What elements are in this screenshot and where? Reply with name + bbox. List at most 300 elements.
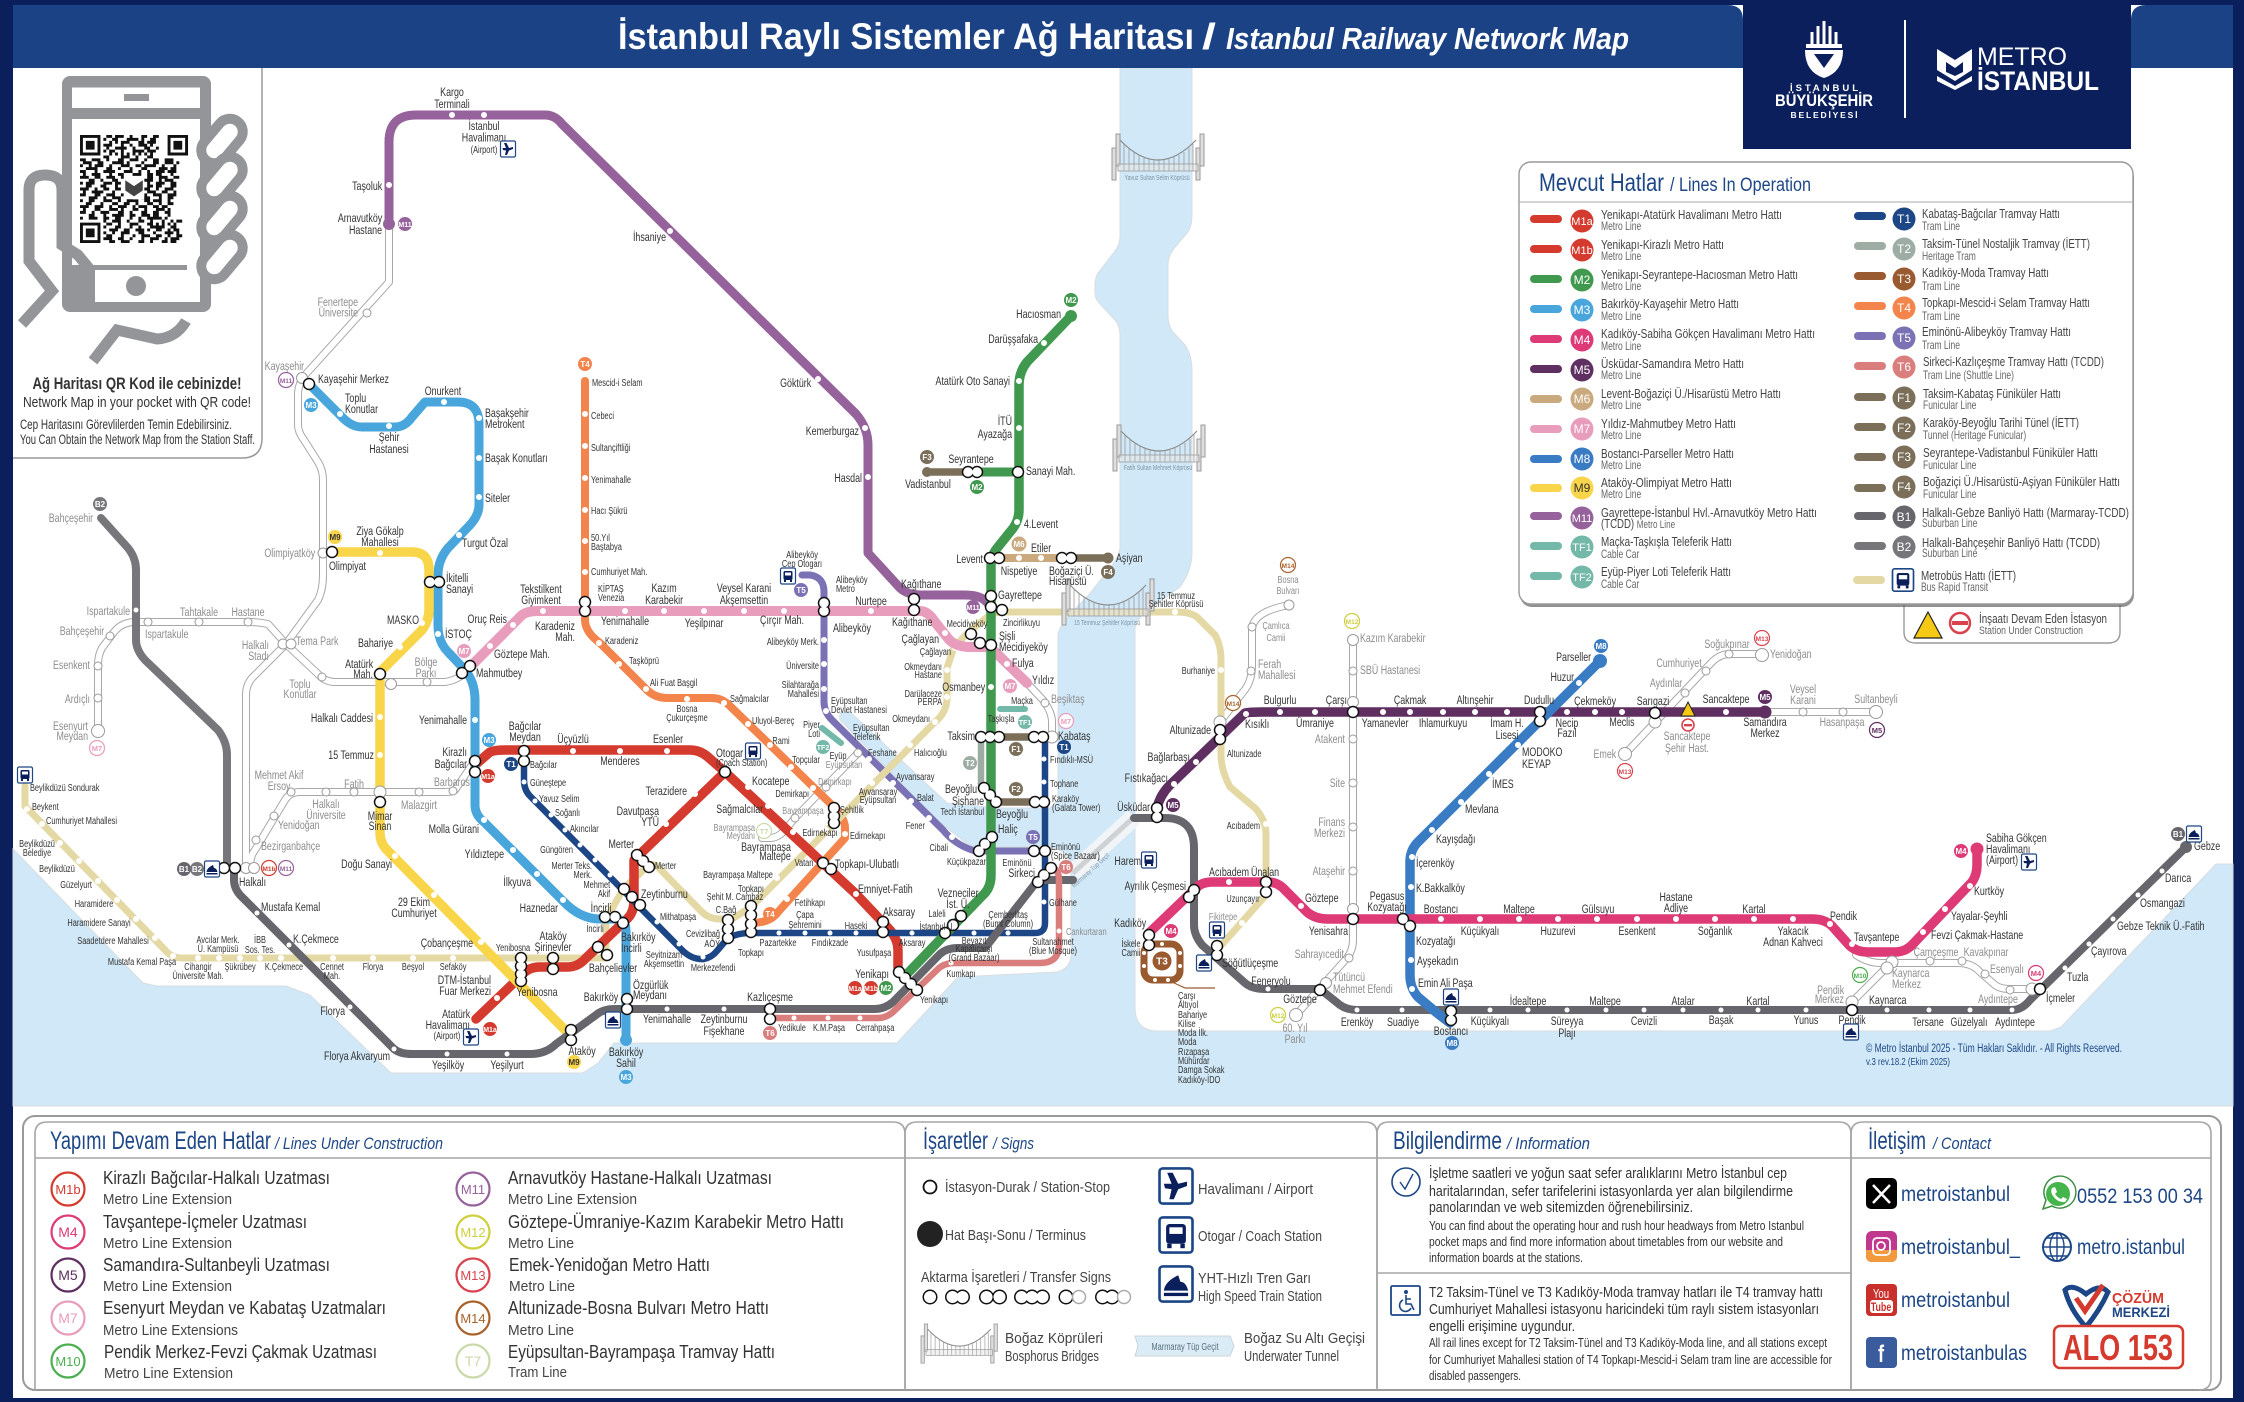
QR text: You Can Obtain the Network Map from the Station Staff. [20, 432, 255, 447]
line badges on map: M11 [966, 605, 980, 612]
station labels: centre west: Baştabya [591, 541, 622, 552]
station labels: centre west: Çağlayan [920, 646, 951, 657]
station labels: northwest: Florya Akvaryum [324, 1050, 390, 1063]
station labels: northwest: Halkalı Caddesi [311, 712, 373, 725]
line: TF1 and TF2 cable cars [822, 709, 1025, 743]
station labels: Asian side: Gebze Teknik Ü.-Fatih [2117, 919, 2205, 933]
station labels: centre west: Sultanahmet [1032, 936, 1074, 947]
station labels: centre west: Rami [772, 735, 790, 746]
station labels: northwest: Başakşehir [485, 407, 529, 420]
station labels: Metrobüs west: Mah. [324, 970, 340, 981]
station labels: northwest: Haznedar [520, 902, 559, 915]
badges column 1: M1b [55, 1182, 81, 1197]
T3 stop names: Altıyol [1178, 999, 1198, 1010]
legend left column: Üsküdar-Samandıra Metro Hattı [1601, 356, 1744, 371]
legend left column: M2 [1574, 273, 1591, 287]
station labels: centre west: Edirnekapı [802, 827, 838, 838]
station labels: centre west: Cibali [930, 842, 948, 853]
station labels: northwest: Halkalı [312, 798, 340, 811]
station labels: northwest: Kemerburgaz [806, 425, 859, 438]
airport sign: Havalimanı / Airport [1198, 1181, 1314, 1198]
station labels: centre west: Atatürk Oto Sanayi [936, 375, 1010, 388]
station labels: centre west: Mithatpaşa [660, 911, 696, 922]
entries column 1: Tavşantepe-İçmeler Uzatması [103, 1212, 307, 1232]
coach station sign: Otogar / Coach Station [1198, 1228, 1322, 1245]
station labels: Asian side: Yayalar-Şeyhli [1951, 910, 2008, 923]
station labels: Asian side: Esenkent [1619, 925, 1656, 938]
station labels: centre west: Eminönü [1002, 857, 1032, 868]
station labels: centre west: Gayrettepe [998, 589, 1042, 602]
station labels: Asian side: Sancaktepe [1703, 693, 1750, 706]
station labels: centre west: (Grand Bazaar) [949, 952, 1000, 963]
station labels: Asian side: Feneryolu [1251, 975, 1291, 988]
station labels: centre west: Karabekir [645, 594, 683, 607]
line badges on map: M9 [568, 1058, 580, 1067]
station labels: northwest: Turgut Özal [462, 536, 508, 550]
station labels: centre west: Sanayi Mah. [1026, 465, 1075, 478]
station labels: northwest: Atatürk [345, 658, 374, 671]
line badges on map: M4 [1165, 927, 1177, 936]
station labels: northwest: Stadı [248, 650, 269, 663]
station labels: Asian side: Altunizade [1227, 748, 1262, 759]
station labels: centre west: Çemberlitaş [988, 909, 1028, 920]
station labels: centre west: Mecidiyeköy [999, 641, 1048, 654]
station labels: northwest: Yenibosna [496, 942, 530, 953]
legend left column: Kadıköy-Sabiha Gökçen Havalimanı Metro Hattı [1601, 326, 1815, 341]
station labels: centre west: Hastane [915, 669, 942, 680]
station labels: centre west: Mahallesi [788, 688, 819, 699]
station labels: Asian side: Yamanevler [1362, 717, 1409, 730]
T3 stop names: Mühürdar [1178, 1055, 1210, 1066]
contact: Facebook: metroistanbulas [1901, 1342, 2027, 1365]
station labels: northwest: 15 Temmuz [328, 749, 374, 762]
line badges on map: M2 [1065, 296, 1077, 305]
station labels: centre west: Şehitler Köprüsü [1149, 598, 1203, 609]
station labels: centre west: C.Bağ [716, 904, 736, 915]
line: M1 [475, 750, 898, 1019]
station labels: Asian side: Mevlana [1465, 803, 1499, 816]
line: M4 [1149, 842, 1984, 952]
station labels: northwest: Metrokent [485, 418, 525, 431]
station labels: Asian side: Gebze [2194, 840, 2220, 853]
station labels: northwest: Kargo [440, 86, 464, 99]
station labels: Asian side: Altunizade [1170, 724, 1211, 737]
T3 stop names: Moda [1178, 1036, 1197, 1047]
line badges on map: T4 [580, 360, 590, 369]
heading: / Information [1506, 1134, 1590, 1153]
legend right column: Eminönü-Alibeyköy Tramvay Hattı [1922, 324, 2071, 339]
station labels: northwest: K.Çekmece [293, 933, 339, 946]
station labels: northwest: (Airport) [471, 144, 497, 155]
station labels: Metrobüs west: Üniversite Mah. [172, 970, 224, 981]
station labels: Asian side: Ayrılık Çeşmesi [1125, 880, 1186, 893]
station labels: northwest: Konutlar [284, 688, 317, 701]
legend right column: Suburban Line [1922, 548, 1978, 560]
station labels: northwest: Ispartakule [145, 628, 189, 641]
station labels: northwest: Çobançeşme [421, 937, 473, 950]
station labels: northwest: Toplu [289, 678, 311, 691]
panel: QR code [13, 68, 262, 458]
airport sign [1160, 1168, 1314, 1204]
station labels: Asian side: Çekmeköy [1574, 695, 1617, 708]
panel: signs [905, 1122, 1377, 1390]
line: M2 [906, 310, 1077, 975]
icon: Marmaray tube: Marmaray Tüp Geçit [1071, 852, 1111, 890]
heading [1868, 1126, 1992, 1155]
high speed train sign: High Speed Train Station [1198, 1288, 1322, 1305]
station labels: centre west: Yenikapı [855, 968, 889, 981]
station labels: centre west: PERPA [918, 696, 942, 707]
station labels: Asian side: Mahallesi [1258, 669, 1295, 682]
station labels: northwest: Özgürlük [633, 978, 669, 992]
station labels: centre west: Yedikule [778, 1022, 806, 1033]
station labels: centre west: Zeytinburnu [641, 888, 688, 901]
line badges on map: TF2 [817, 745, 829, 752]
badges column 2: M12 [460, 1225, 486, 1240]
line: T6 [770, 867, 1059, 1018]
station labels: Asian side: Harem [1114, 855, 1141, 868]
under construction note box: Station Under Construction [1979, 625, 2083, 637]
line badges on map: M8 [1595, 642, 1607, 651]
badges column 2: M14 [460, 1311, 486, 1326]
entries column 1: Metro Line Extension [103, 1235, 232, 1252]
station labels: centre west: Yenimahalle [601, 615, 649, 628]
station labels: Asian side: Aydıntepe [1995, 1016, 2035, 1029]
station labels: centre west: Vatan [795, 857, 813, 868]
station labels: centre west: Merter Teks. [551, 860, 592, 871]
station labels: Asian side: Adnan Kahveci [1763, 936, 1823, 949]
station labels: Asian side: Darıca [2165, 872, 2191, 885]
heading: / Contact [1932, 1134, 1992, 1153]
line badges on map: B1 [2173, 830, 2184, 839]
icon: hand holding phone [22, 76, 248, 361]
station labels: centre west: Bosna [677, 703, 698, 714]
contact: X [1866, 1178, 2010, 1209]
station labels: Asian side: Kartal [1746, 995, 1770, 1008]
badges column 1: M4 [58, 1224, 78, 1240]
line: M3 [309, 384, 632, 1046]
station labels: centre west: Kabataş [1058, 730, 1091, 743]
station labels: Asian side: Göztepe [1283, 993, 1317, 1006]
hollow line badges on map: M12 [1272, 1013, 1285, 1020]
station labels: northwest: Mahmutbey [476, 667, 523, 680]
station labels: centre west: Yenikapı [920, 994, 948, 1005]
station labels: Asian side: Bostancı [1434, 1025, 1468, 1038]
station labels: centre west: (Galata Tower) [1052, 802, 1100, 813]
station stop sign: İstasyon-Durak / Station-Stop [945, 1178, 1110, 1196]
legend left column: TF2 [1572, 572, 1592, 584]
station labels: centre west: Yavuz Selim [539, 793, 580, 804]
station labels: Asian side: İmam H. [1490, 716, 1524, 730]
station labels: centre west: Eyüpsultan [826, 759, 862, 770]
legend right column: Tunnel (Heritage Funicular) [1923, 430, 2026, 442]
T3 stop names: Damga Sokak [1178, 1064, 1225, 1075]
station labels: centre west: Kazım [651, 582, 677, 595]
station labels: centre west: Üçyüzlü [557, 732, 589, 746]
station labels: centre west: Alibeyköy [833, 622, 872, 635]
line badges on map: M11 [398, 222, 412, 229]
legend right column: Seyrantepe-Vadistanbul Füniküler Hattı [1923, 445, 2098, 460]
station labels: centre west: Vezneciler [938, 887, 979, 900]
station labels: centre west: Kağıthane [901, 578, 942, 591]
station labels: northwest: Bahçeşehir [60, 625, 105, 638]
station labels: centre west: Yusufpaşa [857, 947, 891, 958]
station labels: northwest: Malazgirt [401, 799, 437, 812]
station labels: centre west: Akif [598, 888, 611, 899]
entries column 2: Emek-Yenidoğan Metro Hattı [509, 1255, 710, 1275]
station labels: northwest: İncirli [591, 901, 611, 915]
station labels: Asian side: Mehmet Efendi [1333, 983, 1393, 996]
station labels: Asian side: Atalar [1671, 995, 1695, 1008]
station labels: centre west: Taşkışla [988, 713, 1014, 724]
hollow line badges on map: M13 [1756, 636, 1769, 643]
badges column 2: T7 [465, 1353, 481, 1369]
underwater tunnel sign: Boğaz Su Altı Geçişi [1244, 1330, 1365, 1347]
station labels: northwest: Doğu Sanayi [341, 858, 392, 871]
station labels: centre west: Terazidere [646, 785, 687, 798]
station labels: northwest: İstanbul [468, 119, 500, 133]
line badges on map: F1 [1011, 745, 1021, 754]
station labels: northwest: Tema Park [296, 635, 339, 648]
station labels: northwest: İkitelli [446, 571, 468, 585]
logos block: BÜYÜKŞEHİR [1775, 91, 1873, 110]
station labels: Asian side: SBÜ Hastanesi [1360, 663, 1420, 677]
legend right column [1857, 206, 2129, 594]
T3 stop names: Çarşı [1178, 990, 1196, 1001]
legend left column: M4 [1574, 333, 1591, 347]
station labels: Asian side: Samandıra [1743, 716, 1787, 729]
entries column 2: Göztepe-Ümraniye-Kazım Karabekir Metro Hattı [508, 1212, 844, 1232]
station labels: centre west: Vadistanbul [905, 478, 951, 491]
station labels: centre west: Haliç [998, 823, 1018, 836]
legend heading: / Lines In Operation [1670, 175, 1811, 196]
station labels: centre west: Giyimkent [521, 594, 561, 607]
legend right column: Tram Line [1922, 311, 1960, 323]
line: Metrobüs [25, 612, 1266, 958]
station labels: Asian side: Bulvarı [1276, 585, 1300, 596]
line badges on map: M7 [458, 647, 470, 656]
station labels: Asian side: Adliye [1664, 902, 1688, 915]
station labels: northwest: Üniversite [319, 305, 358, 320]
station labels: Asian side: Huzur [1550, 671, 1575, 684]
entries column 2: Metro Line [509, 1278, 575, 1295]
station labels: centre west: Karaköy [1052, 793, 1080, 804]
station labels: Asian side: Güzelyalı [1951, 1016, 1987, 1029]
legend right column: Halkalı-Gebze Banliyö Hattı (Marmaray-TCDD) [1922, 505, 2129, 520]
station labels: centre west: Veysel Karani [717, 582, 771, 595]
hollow line badges on map: M14 [1282, 563, 1295, 570]
station labels: Asian side: Sancaktepe [1664, 730, 1711, 743]
station labels: centre west: Yeşilpınar [685, 617, 724, 630]
header band: / [1202, 16, 1216, 57]
station labels: centre west: Fişekhane [704, 1025, 745, 1038]
heading: / Lines Under Construction [274, 1134, 443, 1153]
station labels: centre west: Ayvansaray [859, 786, 898, 797]
station labels: Asian side: Tavşantepe [1854, 931, 1899, 944]
station labels: centre west: Silahtarağa [782, 679, 819, 690]
station labels: centre west: Bayrampaşa Maltepe [703, 869, 773, 880]
station labels: northwest: Fenertepe [318, 296, 358, 309]
station labels: Asian side: Site [1330, 777, 1345, 790]
line badges on map: B2 [192, 865, 203, 874]
legend left column [1534, 207, 1817, 591]
station labels: centre west: Akşemsettin [644, 958, 684, 969]
legend left column: M7 [1574, 422, 1591, 436]
station labels: Metrobüs west: Avcılar Merk. [197, 934, 239, 945]
legend right column: Funicular Line [1923, 400, 1977, 412]
station labels: centre west: (Coach Station) [716, 757, 767, 768]
operating hours text: You can find about the operating hour and rush hour headways from Metro Istanbul [1429, 1218, 1804, 1233]
station labels: Metrobüs west: Saadetdere Mahallesi [77, 935, 149, 946]
legend right column: T2 [1897, 242, 1911, 256]
station labels: Asian side: Necip [1556, 717, 1578, 730]
legend left column: Yenikapı-Seyrantepe-Hacıosman Metro Hattı [1601, 267, 1798, 282]
lines under construction [98, 224, 2040, 1015]
icon: Marmaray tube [1071, 817, 1134, 890]
line badges on map: M3 [305, 401, 317, 410]
legend right column: Tram Line (Shuttle Line) [1923, 370, 2014, 382]
badges column 2: M11 [461, 1182, 485, 1197]
line badges on map: F3 [922, 453, 932, 462]
T3 stop names: Rızapaşa [1178, 1046, 1209, 1057]
entries column 2: Metro Line Extension [508, 1191, 637, 1208]
station labels: Metrobüs west: Cennet [320, 961, 344, 972]
station labels: Asian side: Söğütlüçeşme [1222, 957, 1278, 970]
line badges on map: M1a [481, 774, 495, 781]
logos block: İSTANBUL [1977, 66, 2099, 96]
station labels: centre west: Otogar [716, 747, 744, 760]
station labels: northwest: Olimpiyatköy [264, 547, 316, 560]
line badges on map: M5 [1759, 693, 1771, 702]
station labels: centre west: Boğaziçi Ü. [1049, 564, 1094, 578]
station labels: centre west: Bağcılar [530, 759, 557, 770]
station labels: centre west: Fulya [1012, 657, 1034, 670]
station labels: northwest: Havalimanı [426, 1019, 470, 1032]
title: İstanbul Raylı Sistemler Ağ Haritası [618, 16, 1194, 57]
entries column 1: Metro Line Extension [103, 1191, 232, 1208]
station labels: Metrobüs west: Beylikdüzü [39, 863, 75, 874]
station labels: centre west: İst. Ü. [946, 897, 970, 911]
station labels: Metrobüs west: Şükrübey [224, 961, 256, 972]
station labels: centre west: Aksaray [883, 906, 916, 919]
badges column 1: M10 [55, 1354, 81, 1369]
hollow line badges on map: M4 [2031, 969, 2042, 978]
station labels: Asian side: Çamçeşme [1914, 946, 1959, 959]
contact: YouTube: Tube [1871, 1301, 1891, 1314]
station labels: centre west: Tophane [1050, 778, 1078, 789]
station labels: northwest: Meydanı [633, 989, 667, 1002]
entries column 1: Esenyurt Meydan ve Kabataş Uzatmaları [103, 1298, 386, 1318]
station labels: centre west: Ayvansaray [896, 771, 935, 782]
legend right column: Metrobüs Hattı (İETT) [1921, 568, 2016, 583]
icon: station under construction on M5 [1681, 702, 1695, 731]
legend right column: F1 [1897, 391, 1911, 405]
panel: information [1377, 1122, 1851, 1390]
station labels: centre west: Bayrampaşa [714, 822, 755, 833]
station labels: centre west: Tekstilkent [520, 583, 562, 596]
high speed train sign: YHT-Hızlı Tren Garı [1198, 1270, 1311, 1287]
QR code [77, 132, 191, 246]
line badges on map: F4 [1103, 568, 1113, 577]
legend right column: Tram Line [1922, 281, 1960, 293]
station labels: Asian side: Üsküdar [1117, 800, 1151, 814]
station labels: northwest: Bezirganbahçe [261, 840, 320, 853]
station labels: northwest: Göktürk [780, 377, 812, 390]
station labels: Asian side: Yenisahra [1309, 925, 1348, 938]
station labels: Asian side: Kozyatağı [1367, 901, 1407, 914]
station labels: northwest: Bahariye [358, 637, 393, 650]
station labels: northwest: Florya [320, 1005, 345, 1018]
station labels: Asian side: Pendik [1839, 1014, 1866, 1027]
badges column 2: M13 [460, 1268, 486, 1283]
station labels: Asian side: Merkezi [1314, 827, 1345, 840]
line: B1 [234, 818, 2192, 1054]
station labels: centre west: Şişli [999, 630, 1015, 643]
station labels: centre west: Yenimahalle [643, 1013, 691, 1026]
station labels: centre west: Karadeniz [605, 635, 638, 646]
station labels: Asian side: Sahrayıcedit [1295, 948, 1344, 961]
station labels: northwest: Kirazlı [442, 746, 467, 759]
line badges on map: T5 [1028, 833, 1038, 842]
station labels: northwest: Bölge [415, 656, 437, 669]
station labels: centre west: Pazartekke [760, 937, 797, 948]
station labels: Asian side: Tuzla [2067, 971, 2088, 984]
legend right column: Tram Line [1922, 340, 1960, 352]
line badges on map [93, 217, 2185, 1084]
station labels: Asian side: Emin Ali Paşa [1418, 977, 1473, 990]
entries column 1: Metro Line Extension [104, 1365, 233, 1382]
line badges on map: M3 [620, 1073, 632, 1082]
contact: YouTube: You [1873, 1288, 1889, 1301]
station labels: centre west: Akıncılar [570, 823, 599, 834]
legend left column: Metro Line [1601, 460, 1641, 472]
station labels: northwest: Yıldıztepe [465, 848, 504, 861]
line badges on map: F2 [1011, 785, 1021, 794]
station labels: centre west: Küçükpazar [947, 856, 986, 867]
line badges on map: T2 [965, 759, 975, 768]
panel: contact [1851, 1122, 2211, 1390]
station labels: Asian side: Soğanlık [1698, 925, 1733, 938]
station labels: centre west: Alibeyköy [836, 574, 868, 585]
station labels: centre west: Seyitnizam [646, 949, 682, 960]
logos block [1743, 5, 2131, 149]
station labels: Asian side: Bulgurlu [1264, 694, 1296, 707]
transfer stations [224, 384, 2040, 1040]
station labels: Asian side: Ünalan [1251, 865, 1279, 879]
station labels: centre west: Kumkapı [946, 968, 976, 979]
entries column 1: Samandıra-Sultanbeyli Uzatması [103, 1255, 330, 1275]
line badges on map: T5 [796, 586, 806, 595]
legend left column: Metro Line [1601, 400, 1641, 412]
station labels: northwest: Havalimanı [462, 131, 506, 145]
legend left column: Ataköy-Olimpiyat Metro Hattı [1601, 475, 1732, 490]
heading: Bilgilendirme [1393, 1127, 1502, 1155]
badges column 2 [456, 1172, 490, 1378]
entries column 2: Arnavutköy Hastane-Halkalı Uzatması [508, 1168, 772, 1188]
station labels: Asian side: Pegasus [1370, 890, 1404, 903]
station labels: centre west: 4.Levent [1024, 518, 1058, 531]
station labels: centre west: Merter [655, 860, 676, 871]
operating hours text: panolarından ve web sitemizden öğrenebilirsiniz. [1429, 1199, 1693, 1216]
station labels: centre west: AÖY [704, 938, 720, 949]
station labels: centre west: Darülaceze [905, 688, 942, 699]
station labels: Asian side: İMES [1492, 777, 1514, 791]
station labels: centre west: Karadeniz [535, 620, 575, 633]
station labels: centre west: Topkapı [738, 883, 764, 894]
station labels: Asian side: Cevizli [1631, 1015, 1657, 1028]
station labels: centre west: Kazlıçeşme [747, 991, 793, 1004]
station labels: northwest: Olimpiyat [329, 560, 366, 573]
